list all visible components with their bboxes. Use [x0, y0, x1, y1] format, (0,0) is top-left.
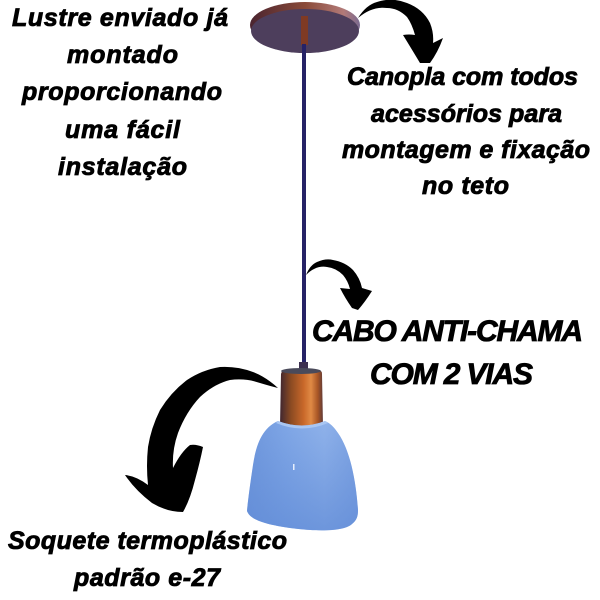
text: canopy note: montagem e fixação: [342, 136, 590, 164]
text: canopy note: acessórios para: [371, 100, 562, 128]
arrow: to canopy: [358, 0, 443, 63]
arrow: to cable: [306, 259, 372, 310]
text: canopy note: [342, 63, 590, 200]
text: cable note: [312, 315, 583, 391]
text: assembled shipping note: proporcionando: [21, 78, 222, 106]
cable: [302, 44, 306, 364]
canopy ceiling plate: [250, 2, 360, 53]
text: canopy note: Canopla com todos: [347, 63, 578, 91]
text: socket note: padrão e-27: [73, 564, 221, 592]
text: socket note: [8, 527, 287, 592]
text: cable note: CABO ANTI-CHAMA: [312, 315, 583, 348]
lamp: [247, 2, 360, 530]
text: cable note: COM 2 VIAS: [370, 358, 533, 391]
text: socket note: Soquete termoplástico: [8, 527, 287, 555]
cable clamp: [299, 362, 308, 372]
text: assembled shipping note: uma fácil: [65, 116, 181, 144]
text: assembled shipping note: [12, 4, 228, 181]
blue glass shade: [247, 421, 358, 530]
text: assembled shipping note: instalação: [58, 153, 187, 181]
text: assembled shipping note: Lustre enviado já: [12, 4, 228, 32]
text: canopy note: no teto: [422, 172, 509, 200]
arrow: to socket: [125, 367, 278, 512]
text: assembled shipping note: montado: [67, 41, 178, 69]
copper socket cover: [280, 368, 323, 426]
